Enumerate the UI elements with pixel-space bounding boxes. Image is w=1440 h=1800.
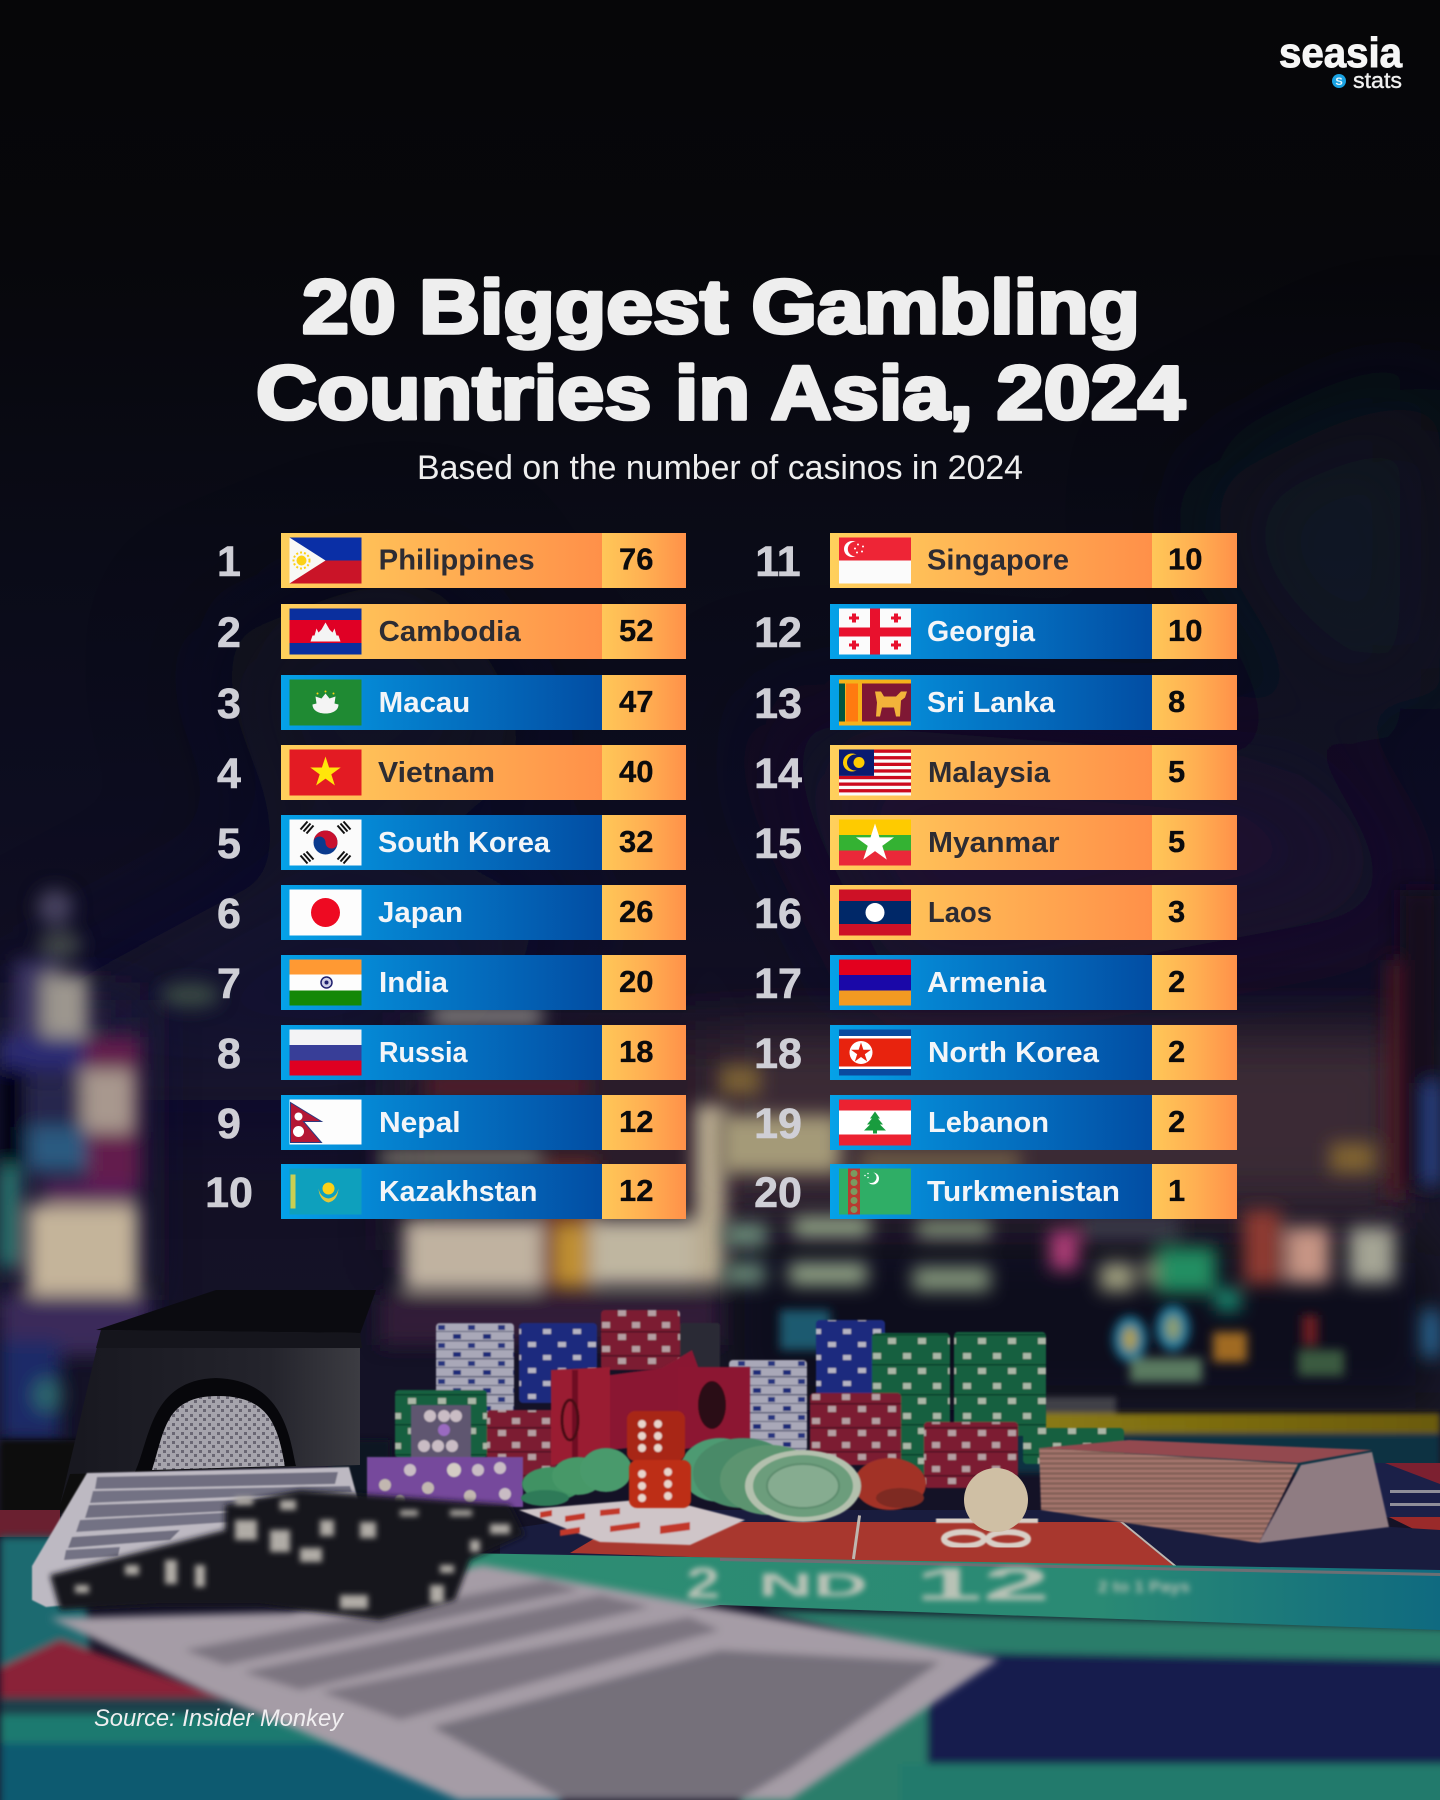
rank: 9 <box>217 1100 241 1148</box>
value: 20 <box>619 964 653 999</box>
rank: 10 <box>205 1169 253 1217</box>
value cell <box>602 815 686 870</box>
row 7 India <box>217 955 686 1010</box>
table number marking <box>936 1520 1038 1546</box>
value cell <box>602 675 686 730</box>
value: 3 <box>1168 894 1185 929</box>
rank: 11 <box>755 538 801 586</box>
country name: Armenia <box>927 967 1047 999</box>
country name: India <box>379 967 449 999</box>
value cell <box>1152 1025 1237 1080</box>
country name: Kazakhstan <box>379 1176 537 1208</box>
row 5 South Korea <box>217 815 686 870</box>
row 12 Georgia <box>754 604 1237 659</box>
rank: 12 <box>754 609 802 657</box>
transparent purple dice <box>367 1405 523 1507</box>
country name: Lebanon <box>928 1107 1049 1139</box>
bar <box>830 533 1152 588</box>
value cell <box>1152 815 1237 870</box>
icon: flag Lebanon <box>839 1100 911 1146</box>
bar <box>281 1095 602 1150</box>
icon: flag South Korea <box>290 820 362 866</box>
icon: flag Vietnam <box>290 750 362 796</box>
country name: Laos <box>928 897 992 929</box>
value cell <box>602 1025 686 1080</box>
icon: flag Cambodia <box>290 608 362 654</box>
country name: Georgia <box>927 616 1036 648</box>
row 10 Kazakhstan <box>205 1164 686 1219</box>
bar <box>281 604 602 659</box>
red card boxes <box>551 1350 750 1465</box>
rank: 20 <box>754 1169 802 1217</box>
bar <box>281 815 602 870</box>
card shoe <box>60 1290 376 1505</box>
title <box>256 265 1185 436</box>
bar <box>830 675 1152 730</box>
country name: Russia <box>379 1037 468 1069</box>
ivory ball <box>964 1468 1028 1532</box>
row 9 Nepal <box>217 1095 686 1150</box>
blurred slot machines center <box>380 1005 725 1345</box>
row 3 Macau <box>217 675 686 730</box>
country name: Vietnam <box>378 757 495 789</box>
value: 32 <box>619 824 653 859</box>
faint top haze <box>0 370 1440 1100</box>
bar <box>830 604 1152 659</box>
value: 47 <box>619 684 653 719</box>
rank: 17 <box>754 960 802 1008</box>
value: 12 <box>619 1104 653 1139</box>
icon: flag Nepal <box>290 1100 362 1144</box>
value cell <box>1152 533 1237 588</box>
value: 5 <box>1168 824 1185 859</box>
bar <box>830 745 1152 800</box>
country name: Japan <box>378 897 463 929</box>
table lettering, out of focus: 2 <box>686 1559 720 1608</box>
icon: flag Japan <box>290 890 362 936</box>
row 2 Cambodia <box>217 604 686 659</box>
icon: flag Armenia <box>839 960 911 1006</box>
icon: flag Philippines <box>290 538 362 584</box>
value: 1 <box>1168 1173 1185 1208</box>
country name: Cambodia <box>379 616 522 648</box>
row 1 Philippines <box>217 533 686 588</box>
value cell <box>602 955 686 1010</box>
rank: 13 <box>754 680 802 728</box>
bar <box>281 955 602 1010</box>
black chips in the foreground <box>50 1490 525 1620</box>
value cell <box>1152 745 1237 800</box>
country name: South Korea <box>378 827 551 859</box>
title: 20 Biggest Gambling <box>302 265 1140 350</box>
country name: Macau <box>379 687 470 719</box>
country name: Philippines <box>379 544 535 576</box>
icon: flag India <box>290 960 362 1006</box>
value cell <box>1152 885 1237 940</box>
value cell <box>1152 675 1237 730</box>
value: 2 <box>1168 1034 1185 1069</box>
bar <box>281 1164 602 1219</box>
value cell <box>1152 1164 1237 1219</box>
value: 40 <box>619 754 653 789</box>
logo icon: S <box>1335 76 1343 88</box>
icon: flag North Korea <box>839 1030 911 1076</box>
rank: 7 <box>217 960 241 1008</box>
value: 5 <box>1168 754 1185 789</box>
rank: 18 <box>754 1030 802 1078</box>
icon: flag Turkmenistan <box>839 1168 911 1214</box>
table far edge <box>0 1397 1440 1520</box>
bar <box>281 885 602 940</box>
ranking column: 11 to 20 <box>754 533 1237 1219</box>
value: 10 <box>1168 613 1202 648</box>
rank: 3 <box>217 680 241 728</box>
value cell <box>1152 604 1237 659</box>
blurred lights above table right <box>780 1305 1344 1382</box>
icon: flag Sri Lanka <box>839 680 911 726</box>
title: Countries in Asia, 2024 <box>256 351 1185 436</box>
rank: 8 <box>217 1030 241 1078</box>
rank: 4 <box>217 750 241 798</box>
value cell <box>602 533 686 588</box>
foreground blurred cards <box>50 1565 999 1800</box>
value: 26 <box>619 894 653 929</box>
value: 2 <box>1168 964 1185 999</box>
row 17 Armenia <box>754 955 1237 1010</box>
country name: Singapore <box>927 544 1069 576</box>
icon: flag Georgia <box>839 608 911 654</box>
icon: flag Malaysia <box>839 750 911 796</box>
value cell <box>602 745 686 800</box>
bar <box>830 1025 1152 1080</box>
icon: flag Macau <box>290 680 362 726</box>
icon: flag Russia <box>290 1030 362 1076</box>
row 13 Sri Lanka <box>754 675 1237 730</box>
bar <box>281 1025 602 1080</box>
face up playing cards <box>519 1498 745 1545</box>
value cell <box>1152 955 1237 1010</box>
table lettering, out of focus: ND <box>758 1567 868 1603</box>
rank: 16 <box>754 890 802 938</box>
blurred slot machines left <box>0 889 220 1440</box>
value cell <box>602 1164 686 1219</box>
table lettering, out of focus: 12 <box>915 1558 1050 1610</box>
row 19 Lebanon <box>754 1095 1237 1150</box>
roulette table surface <box>0 1463 1440 1578</box>
bar <box>830 1164 1152 1219</box>
broad haze behind lights <box>0 1000 1440 1410</box>
country name: Sri Lanka <box>927 687 1056 719</box>
row 11 Singapore <box>755 533 1237 588</box>
rank: 5 <box>217 820 241 868</box>
row 8 Russia <box>217 1025 686 1080</box>
logo sub word: stats <box>1353 68 1402 93</box>
row 6 Japan <box>217 885 686 940</box>
dealt cards under shoe <box>32 1467 358 1607</box>
rank: 6 <box>217 890 241 938</box>
country name: Nepal <box>379 1107 461 1139</box>
source note: Source: Insider Monkey <box>94 1705 345 1732</box>
icon: flag Myanmar <box>839 820 911 866</box>
value: 12 <box>619 1173 653 1208</box>
ranking column: 1 to 10 <box>205 533 686 1219</box>
green dozen band <box>300 1552 1440 1640</box>
card deck <box>1039 1440 1389 1543</box>
bar <box>281 675 602 730</box>
country name: Myanmar <box>928 827 1060 859</box>
country name: North Korea <box>928 1037 1100 1069</box>
value: 2 <box>1168 1104 1185 1139</box>
icon: flag Singapore <box>839 538 911 584</box>
row 18 North Korea <box>754 1025 1237 1080</box>
rank: 2 <box>217 609 241 657</box>
chip stacks <box>395 1310 1124 1488</box>
subtitle: Based on the number of casinos in 2024 <box>417 449 1023 487</box>
bar <box>830 1095 1152 1150</box>
row 14 Malaysia <box>754 745 1237 800</box>
lower table, out of focus <box>0 1537 1440 1800</box>
row 15 Myanmar <box>754 815 1237 870</box>
value: 52 <box>619 613 653 648</box>
country name: Turkmenistan <box>927 1176 1120 1208</box>
value: 10 <box>1168 542 1202 576</box>
value: 76 <box>619 542 653 576</box>
bar <box>281 745 602 800</box>
green chips lying <box>521 1438 926 1522</box>
logo wordmark: seasia <box>1279 29 1403 76</box>
rank: 19 <box>754 1100 802 1148</box>
value cell <box>1152 1095 1237 1150</box>
value cell <box>602 885 686 940</box>
table lettering, out of focus: 2 to 1 Pays <box>1098 1579 1190 1596</box>
row 4 Vietnam <box>217 745 686 800</box>
bar <box>281 533 602 588</box>
country name: Malaysia <box>928 757 1051 789</box>
rank: 15 <box>754 820 802 868</box>
icon: flag Laos <box>839 890 911 936</box>
row 16 Laos <box>754 885 1237 940</box>
value: 8 <box>1168 684 1185 719</box>
value cell <box>602 1095 686 1150</box>
bar <box>830 815 1152 870</box>
rank: 1 <box>217 538 241 586</box>
blurred slot machines right <box>720 890 1440 1357</box>
value cell <box>602 604 686 659</box>
rank: 14 <box>754 750 802 798</box>
table lettering, out of focus <box>686 1558 1190 1610</box>
icon: flag Kazakhstan <box>290 1168 362 1214</box>
red dice <box>627 1411 691 1508</box>
value: 18 <box>619 1034 653 1069</box>
row 20 Turkmenistan <box>754 1164 1237 1219</box>
bar <box>830 885 1152 940</box>
bar <box>830 955 1152 1010</box>
logo <box>1279 29 1403 93</box>
